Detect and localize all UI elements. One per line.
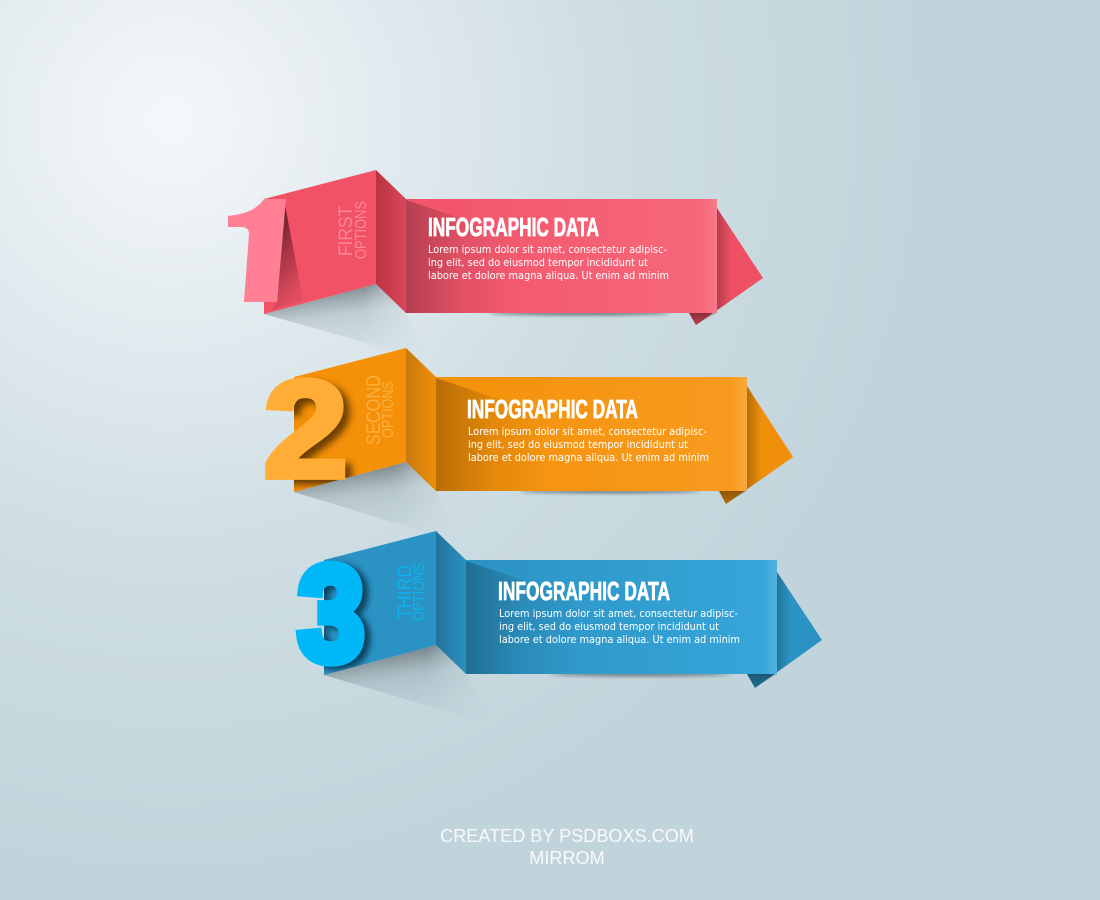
body text 3: Lorem ipsum dolor sit amet, consectetur adipisc-	[499, 607, 738, 620]
ribbon 1	[218, 166, 763, 352]
side label 1: OPTIONS	[353, 201, 370, 259]
side label 1: FIRST	[336, 206, 357, 256]
under-ribbon shadow 3	[550, 672, 730, 676]
body text 2: ing elit, sed do eiusmod tempor incididunt ut	[468, 438, 689, 451]
arrow tail 3	[747, 572, 822, 688]
fold 1	[376, 170, 406, 313]
side label 3	[395, 563, 428, 621]
under-ribbon shadow 1	[490, 312, 670, 316]
body text 1: Lorem ipsum dolor sit amet, consectetur adipisc-	[428, 243, 667, 256]
body text 2	[468, 425, 709, 464]
footer credit: MIRROM	[529, 848, 605, 868]
cast shadow 2	[294, 462, 433, 524]
main band 3	[466, 560, 777, 674]
body text 3	[499, 607, 740, 646]
number 1: 1	[218, 166, 301, 334]
side label 3: OPTIONS	[411, 563, 428, 621]
digit shadow 1	[272, 205, 303, 310]
body text 3: labore et dolore magna aliqua. Ut enim ad minim	[499, 633, 740, 646]
left panel 1	[264, 170, 376, 314]
body text 1: ing elit, sed do eiusmod tempor incididunt ut	[428, 256, 649, 269]
side label 1	[336, 201, 370, 259]
body text 2: labore et dolore magna aliqua. Ut enim ad minim	[468, 451, 709, 464]
arrow tail 1	[689, 208, 763, 325]
arrow tail 2	[719, 386, 793, 504]
cast shadow 3	[324, 645, 465, 707]
left panel 2	[294, 348, 406, 492]
side label 2: OPTIONS	[380, 381, 397, 438]
digit shadow 2: 2	[270, 356, 354, 512]
number 2: 2	[263, 352, 348, 506]
fold 3	[436, 531, 466, 674]
heading 2: INFOGRAPHIC DATA	[467, 394, 638, 424]
footer credit	[440, 826, 694, 868]
body text 3: ing elit, sed do eiusmod tempor incididunt ut	[499, 620, 720, 633]
side label 2: SECOND	[364, 375, 385, 445]
ribbon 3	[298, 531, 822, 716]
side label 3: THIRD	[395, 565, 416, 619]
ribbon 2	[263, 348, 793, 533]
body text 2: Lorem ipsum dolor sit amet, consectetur adipisc-	[468, 425, 707, 438]
body text 1: labore et dolore magna aliqua. Ut enim ad minim	[428, 269, 669, 282]
left panel 3	[324, 531, 436, 675]
heading 3: INFOGRAPHIC DATA	[498, 576, 670, 606]
fold 2	[406, 348, 436, 491]
main band 2	[436, 377, 747, 491]
number 3: 3	[298, 538, 364, 689]
side label 2	[364, 375, 397, 445]
heading 1: INFOGRAPHIC DATA	[428, 212, 599, 242]
footer credit: CREATED BY PSDBOXS.COM	[440, 826, 694, 846]
body text 1	[428, 243, 669, 282]
cast shadow 1	[264, 284, 405, 345]
main band 1	[406, 199, 717, 313]
digit shadow 3: 3	[304, 541, 370, 692]
under-ribbon shadow 2	[520, 490, 700, 494]
